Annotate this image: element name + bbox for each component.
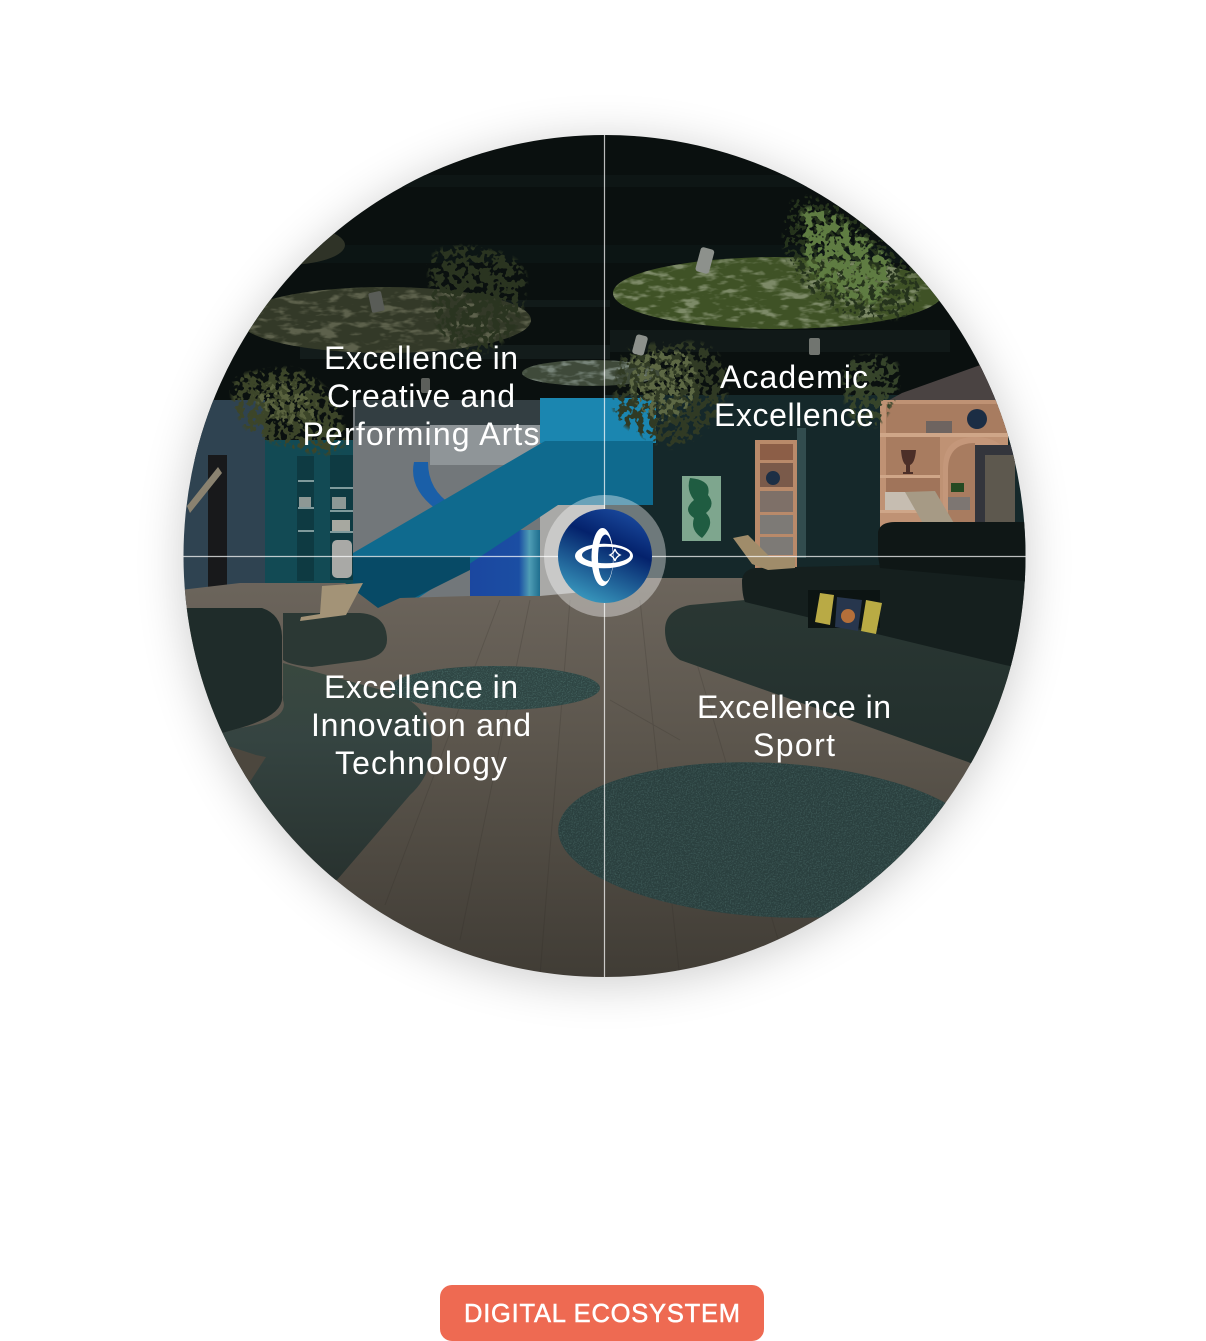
white figure: [332, 540, 352, 578]
foliage far left: [230, 366, 346, 456]
blue art ribbon: [413, 462, 444, 506]
label: creative and performing arts: Creative and: [327, 378, 515, 414]
wood floor: [180, 578, 1035, 980]
back room wall right: [605, 395, 1035, 582]
small rug: [390, 666, 600, 710]
teal bookcase: [265, 440, 355, 585]
ceiling spotlights: [368, 247, 820, 393]
floor seat left: [283, 613, 387, 667]
label: innovation and technology: Technology: [335, 745, 507, 781]
mauve upper wall: [890, 365, 997, 403]
label: sport: Excellence in: [697, 689, 891, 725]
button: digital ecosystem: DIGITAL ECOSYSTEM: [464, 1300, 740, 1328]
black door: [208, 455, 227, 587]
label: sport: Sport: [753, 727, 835, 763]
label: academic excellence: [714, 359, 874, 433]
ceiling disc far left: [300, 234, 345, 264]
stepped sofa bottom tier: [665, 600, 1012, 764]
centre hub: [544, 495, 666, 617]
foliage small stairs: [590, 400, 606, 430]
big bench left: [222, 663, 432, 880]
large rug: [558, 762, 946, 918]
label: creative and performing arts: Excellence in: [324, 340, 518, 376]
tan chair right: [733, 535, 795, 570]
magazines: [808, 590, 882, 634]
left wall: [180, 400, 265, 605]
hub outer ring: [544, 495, 666, 617]
foliage right of centre: [840, 355, 905, 440]
ceiling disc right: [613, 257, 943, 329]
ceiling disc centre: [522, 360, 662, 386]
label: innovation and technology: [311, 669, 531, 781]
ceiling: [180, 130, 1030, 460]
label: academic excellence: Academic: [720, 359, 868, 395]
label: creative and performing arts: [302, 340, 540, 452]
ceiling disc left: [239, 287, 531, 353]
label: sport: [697, 689, 891, 763]
label: academic excellence: Excellence: [714, 397, 874, 433]
label: innovation and technology: Excellence in: [324, 669, 518, 705]
label: creative and performing arts: Performing Arts: [302, 416, 540, 452]
green poster: [682, 476, 721, 541]
hub disc: [558, 509, 652, 603]
blue column: [470, 530, 540, 602]
label: innovation and technology: Innovation and: [311, 707, 531, 743]
crosshair lines: [184, 135, 1026, 977]
button: digital ecosystem: [440, 1285, 764, 1341]
wood seat lower left: [228, 746, 266, 782]
dark column: [797, 428, 806, 558]
ecosystem diagram: [162, 120, 1046, 1341]
stepped sofa middle tier: [742, 565, 1040, 672]
bright back room: [353, 400, 605, 605]
big peach shelving: [880, 400, 1015, 530]
tan laptop chair left: [300, 583, 363, 621]
panel: interior scene circle: [180, 130, 1040, 980]
foliage top right: [780, 190, 925, 320]
peach bookcase: [755, 440, 797, 572]
blue staircase: [353, 441, 653, 612]
foliage centre: [610, 340, 735, 455]
circle drop shadow: [184, 141, 1026, 983]
tan wall strip: [187, 467, 222, 513]
foliage hanging left: [425, 245, 530, 360]
block sofa left: [186, 608, 282, 733]
bright blue window: [540, 398, 656, 443]
foliage arch: [955, 445, 975, 475]
stepped sofa top tier: [878, 522, 1035, 582]
icon: orbit logo: [575, 528, 633, 586]
